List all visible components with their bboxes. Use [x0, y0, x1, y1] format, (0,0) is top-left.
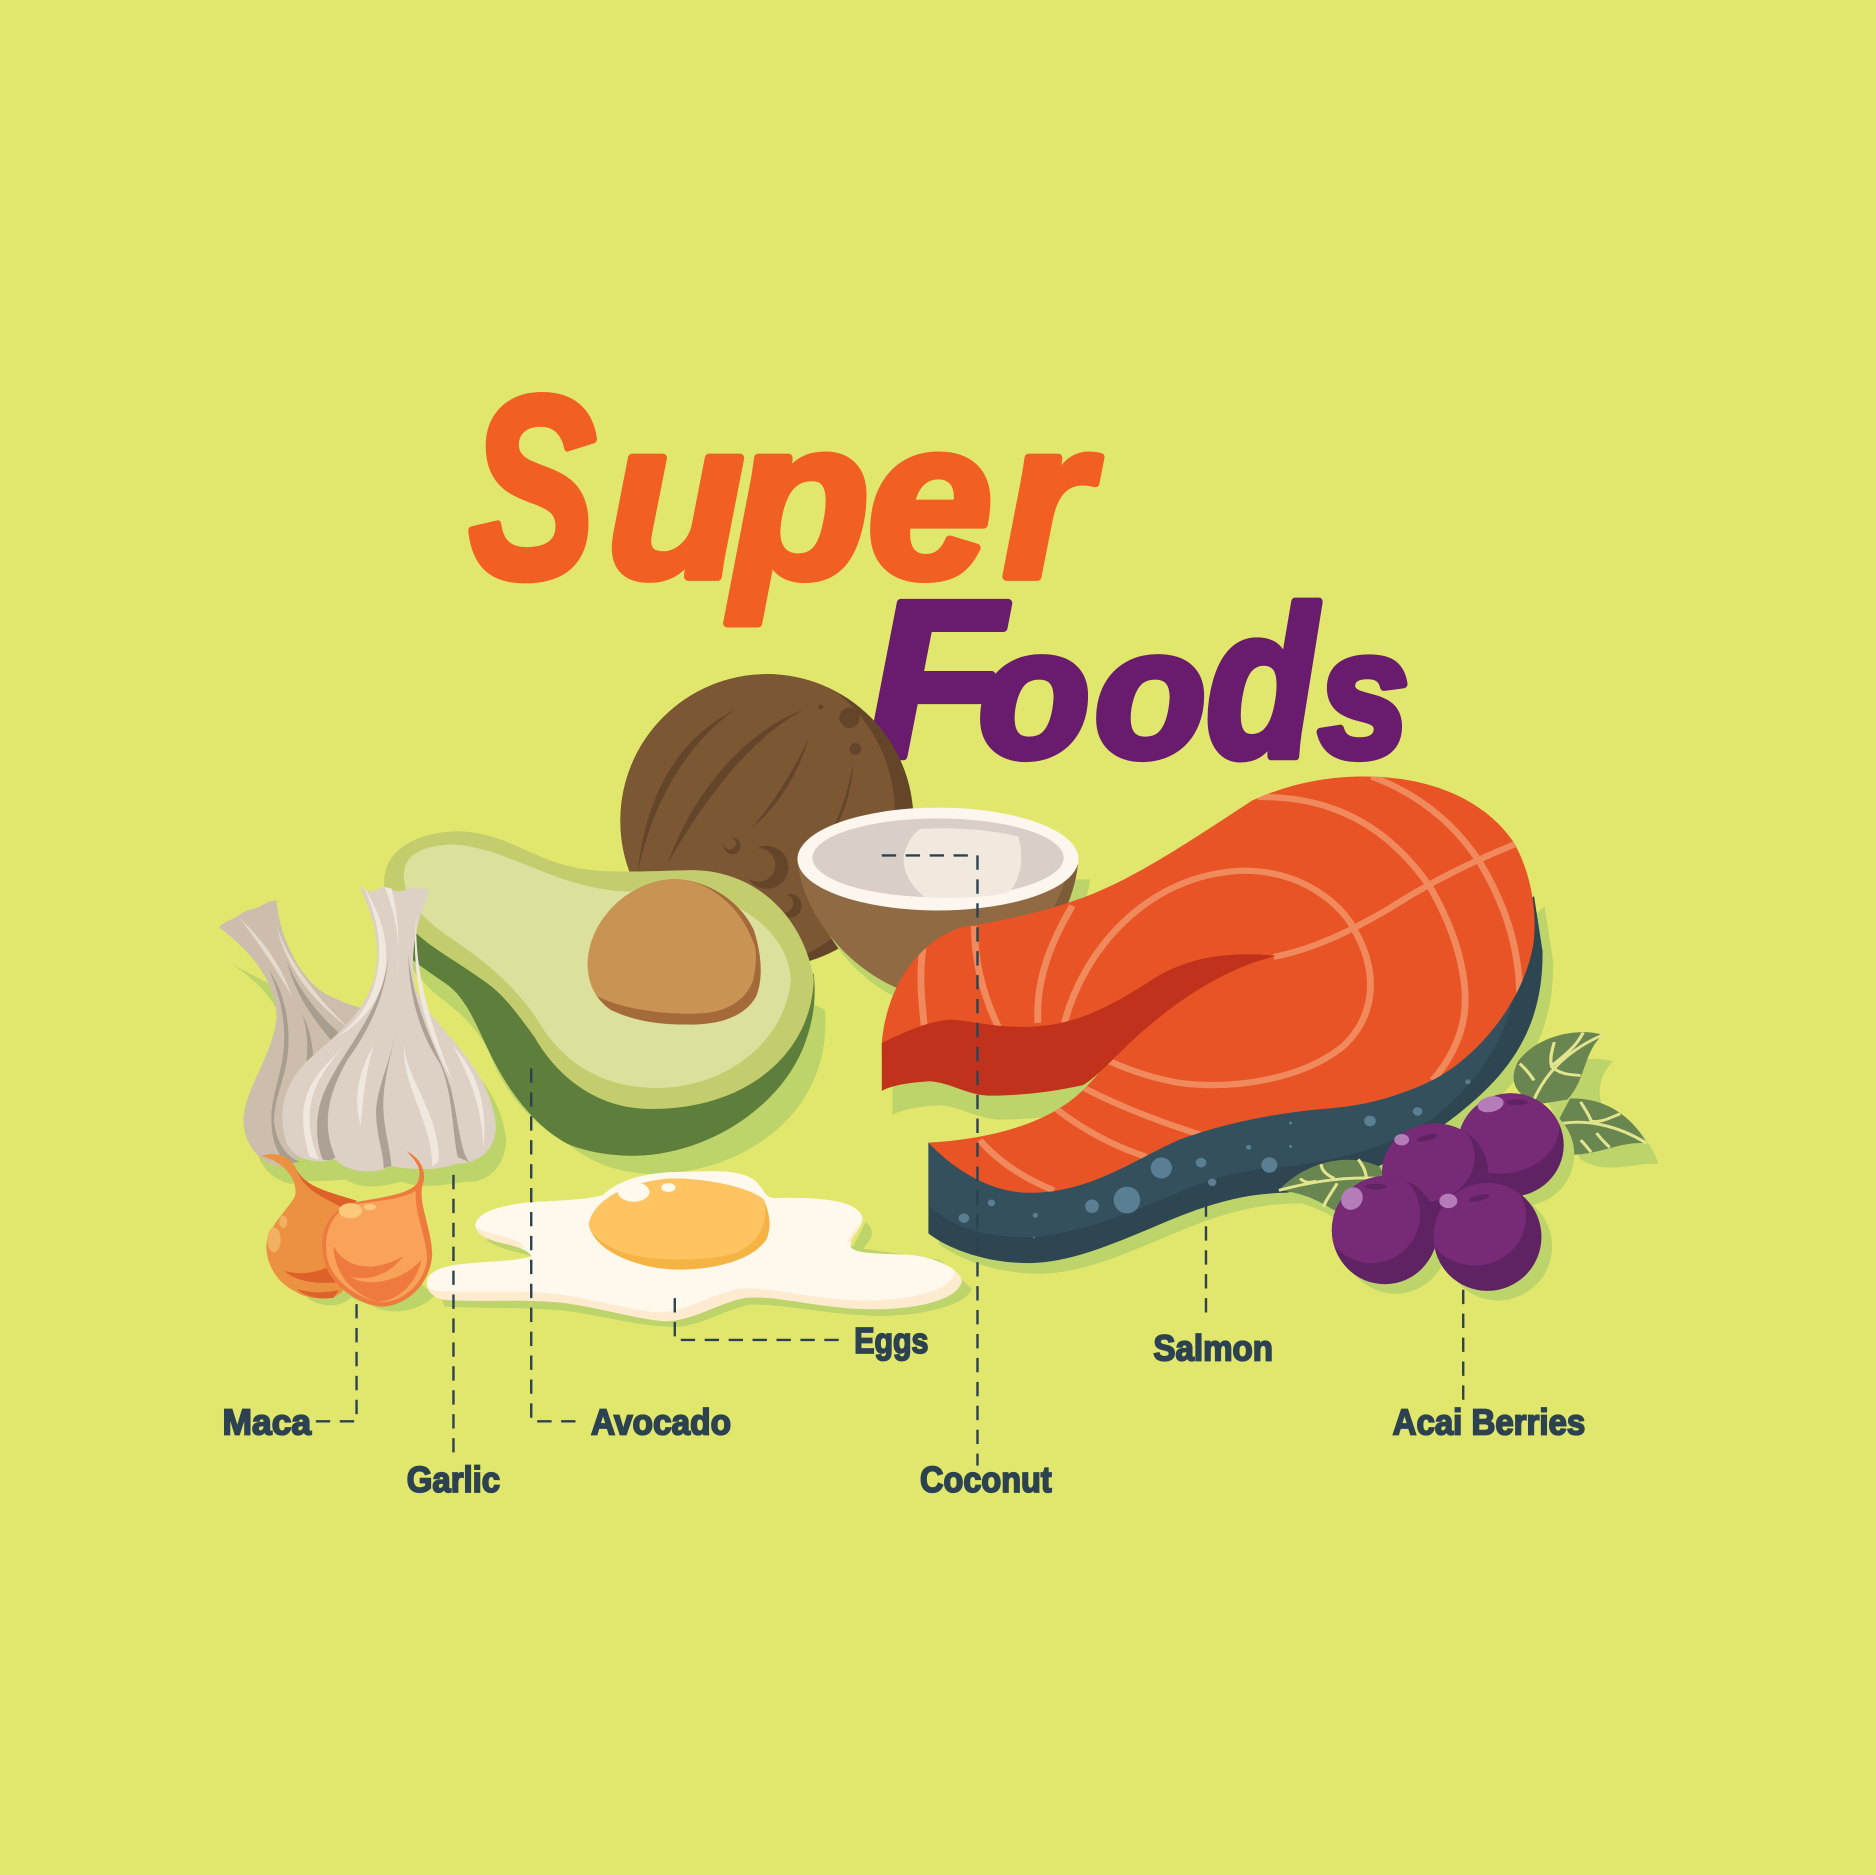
berry back left — [1382, 1123, 1488, 1219]
label: Coconut: Coconut — [920, 1460, 1052, 1500]
label: Eggs: Eggs — [854, 1321, 928, 1361]
title word: Foods: o — [979, 591, 1090, 795]
title word: Super: S — [469, 343, 597, 632]
icon: salmon steak — [882, 776, 1553, 1274]
title word: Super: u — [607, 373, 744, 625]
icon: coconut half — [797, 808, 1090, 1012]
salmon shadow — [892, 907, 1553, 1274]
title word: Foods: s — [1318, 591, 1409, 795]
label: Maca: Maca — [223, 1402, 312, 1442]
leader: maca — [313, 1304, 357, 1421]
icon: garlic — [219, 886, 506, 1186]
label: Garlic: Garlic — [407, 1460, 500, 1500]
leader: salmon — [1205, 1202, 1207, 1314]
icon: fried egg — [420, 1162, 972, 1327]
title word: Super: p — [727, 373, 870, 625]
salmon skin spots — [959, 1079, 1471, 1238]
title word: Foods: d — [1206, 564, 1319, 802]
salmon flesh lines — [921, 776, 1520, 1190]
icon: coconut shell whole — [620, 674, 913, 961]
title word: Super: e — [867, 373, 993, 625]
title word: Super: r — [1003, 373, 1101, 625]
leader: garlic — [452, 1175, 454, 1454]
icon: avocado — [385, 831, 825, 1174]
label: Avocado: Avocado — [591, 1402, 731, 1442]
icon: acai berries with leaves — [1279, 1032, 1658, 1300]
title word: Foods: F — [867, 556, 1008, 804]
leader: eggs — [675, 1298, 841, 1340]
label: Acai Berries: Acai Berries — [1393, 1402, 1585, 1442]
salmon skin — [928, 896, 1543, 1263]
label: Salmon: Salmon — [1153, 1328, 1273, 1368]
berry front right — [1434, 1182, 1542, 1291]
berry shadows — [1342, 1103, 1574, 1300]
leader: avocado — [531, 1068, 583, 1421]
leaves — [1279, 1032, 1658, 1222]
salmon flesh — [882, 776, 1535, 1193]
berry back right — [1460, 1093, 1564, 1196]
berry front left — [1332, 1176, 1436, 1284]
title word: Foods: o — [1095, 591, 1206, 795]
icon: maca root — [261, 1151, 435, 1311]
salmon dark band — [882, 954, 1276, 1096]
leader: acai berries — [1462, 1290, 1464, 1400]
leader: coconut — [882, 855, 977, 1466]
leader lines — [313, 855, 1463, 1466]
